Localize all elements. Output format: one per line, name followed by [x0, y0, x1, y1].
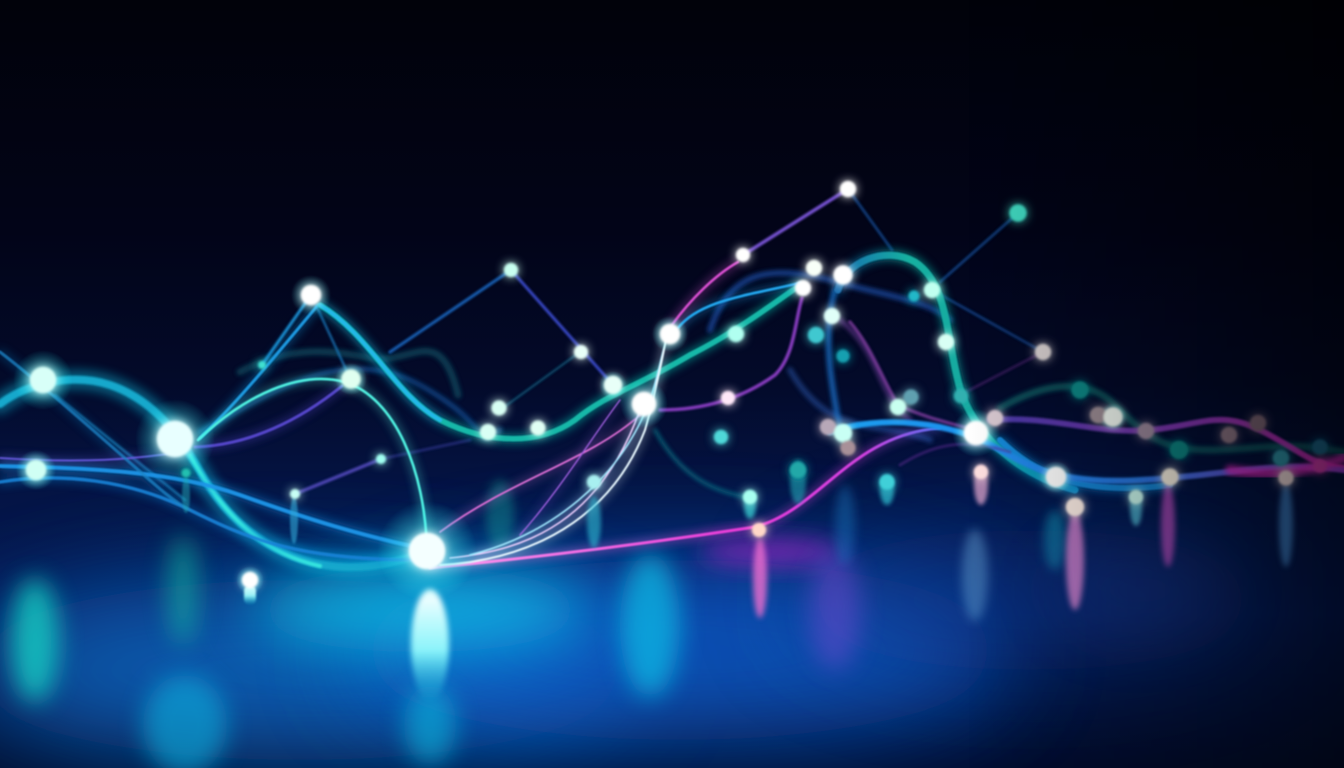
wave: magenta and white fan into main node [430, 262, 940, 568]
distant soft trails [200, 273, 1344, 497]
wave: purple and blue trails right [660, 298, 1344, 481]
nodes: bright points [26, 181, 1328, 588]
wave: teal ridge [320, 285, 800, 439]
wave: thin cyan arc into main node [198, 379, 427, 550]
wave: teal arc upper right [838, 255, 1170, 490]
connector lines [55, 189, 1043, 500]
reflections under nodes [182, 460, 1293, 701]
wave: thick cyan left [0, 380, 425, 567]
nodes: soft halos [13, 275, 1127, 601]
floor glow [0, 480, 1270, 768]
wave: blue and purple bundle left [0, 305, 420, 560]
